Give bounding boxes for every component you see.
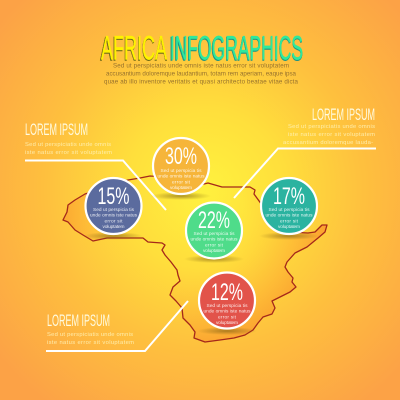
callout: top left: LOREM IPSUM (25, 120, 88, 139)
callout: top left: Sed ut perspiciatis unde omnis (25, 142, 111, 148)
circle: 12%: unde omnis iste natus (204, 308, 251, 314)
callout: bottom left: LOREM IPSUM (47, 311, 110, 330)
circle: 15%: error sit (104, 218, 123, 224)
circle: 15%: unde omnis iste natus (90, 212, 138, 218)
circle: 12%: 12% (211, 279, 243, 306)
circle: 17%: unde omnis iste natus (266, 212, 313, 218)
circle: 15%: voluptatem (102, 224, 124, 230)
circle: 12%: voluptatem (216, 320, 238, 326)
circle: 15%: 15% (98, 183, 130, 210)
intro text (104, 62, 299, 86)
callout: top right: Sed ut perspiciatis unde omnis (288, 124, 375, 130)
circle: 15%: Sed ut perspicia tis (93, 207, 135, 213)
circle: 22%: unde omnis iste natus (190, 236, 238, 242)
intro text: Sed ut perspiciatis unde omnis iste natus error sit voluptatem (113, 62, 289, 70)
circle: 30% (151, 138, 211, 200)
circle: 22%: Sed ut perspicia tis (194, 231, 235, 237)
intro text: accusantium doloremque laudantium, totam rem aperiam, eaque ipsa (106, 70, 297, 78)
circle: 22%: 22% (198, 207, 230, 234)
circle: 30%: unde omnis iste natus (158, 174, 205, 180)
circle: 15% (83, 178, 143, 240)
callout: bottom left: iste natus error sit voluptatem (47, 340, 134, 346)
title: AFRICA (100, 30, 167, 68)
circle: 17%: voluptatem (278, 224, 300, 230)
circle: 30%: error sit (172, 180, 191, 186)
circle: 17%: Sed ut perspicia tis (268, 207, 310, 213)
circle: 22%: error sit (205, 242, 224, 248)
circle: 30%: Sed ut perspicia tis (160, 168, 202, 174)
map: Africa outline (63, 176, 327, 342)
title: AFRICA (101, 30, 167, 68)
callout: bottom left (46, 301, 188, 351)
circle: 12%: error sit (218, 314, 237, 320)
circle: 22%: voluptatem (203, 248, 225, 254)
circle: 17% (259, 178, 319, 240)
circle: 12%: Sed ut perspicia tis (206, 303, 248, 309)
callout: top right: iste natus error sit voluptatem (288, 132, 375, 138)
intro text: quae ab illo inventore veritatis et quasi architecto beatae vitae dicta (104, 78, 299, 86)
callout: top right: accusantium doloremque lauda- (283, 140, 373, 146)
circle: 17%: error sit (280, 218, 299, 224)
circle: 30%: voluptatem (170, 185, 192, 191)
circle: 17%: 17% (273, 183, 305, 210)
circle: 12% (197, 272, 257, 335)
circle: 30%: 30% (165, 143, 197, 170)
circle: 22% (184, 202, 244, 263)
callout: bottom left: Sed ut perspiciatis unde omnis (47, 332, 133, 338)
callout: top left (25, 120, 166, 210)
callout: top right (234, 105, 376, 198)
title (100, 30, 303, 68)
callout: top left: iste natus error sit voluptatem (25, 150, 112, 156)
